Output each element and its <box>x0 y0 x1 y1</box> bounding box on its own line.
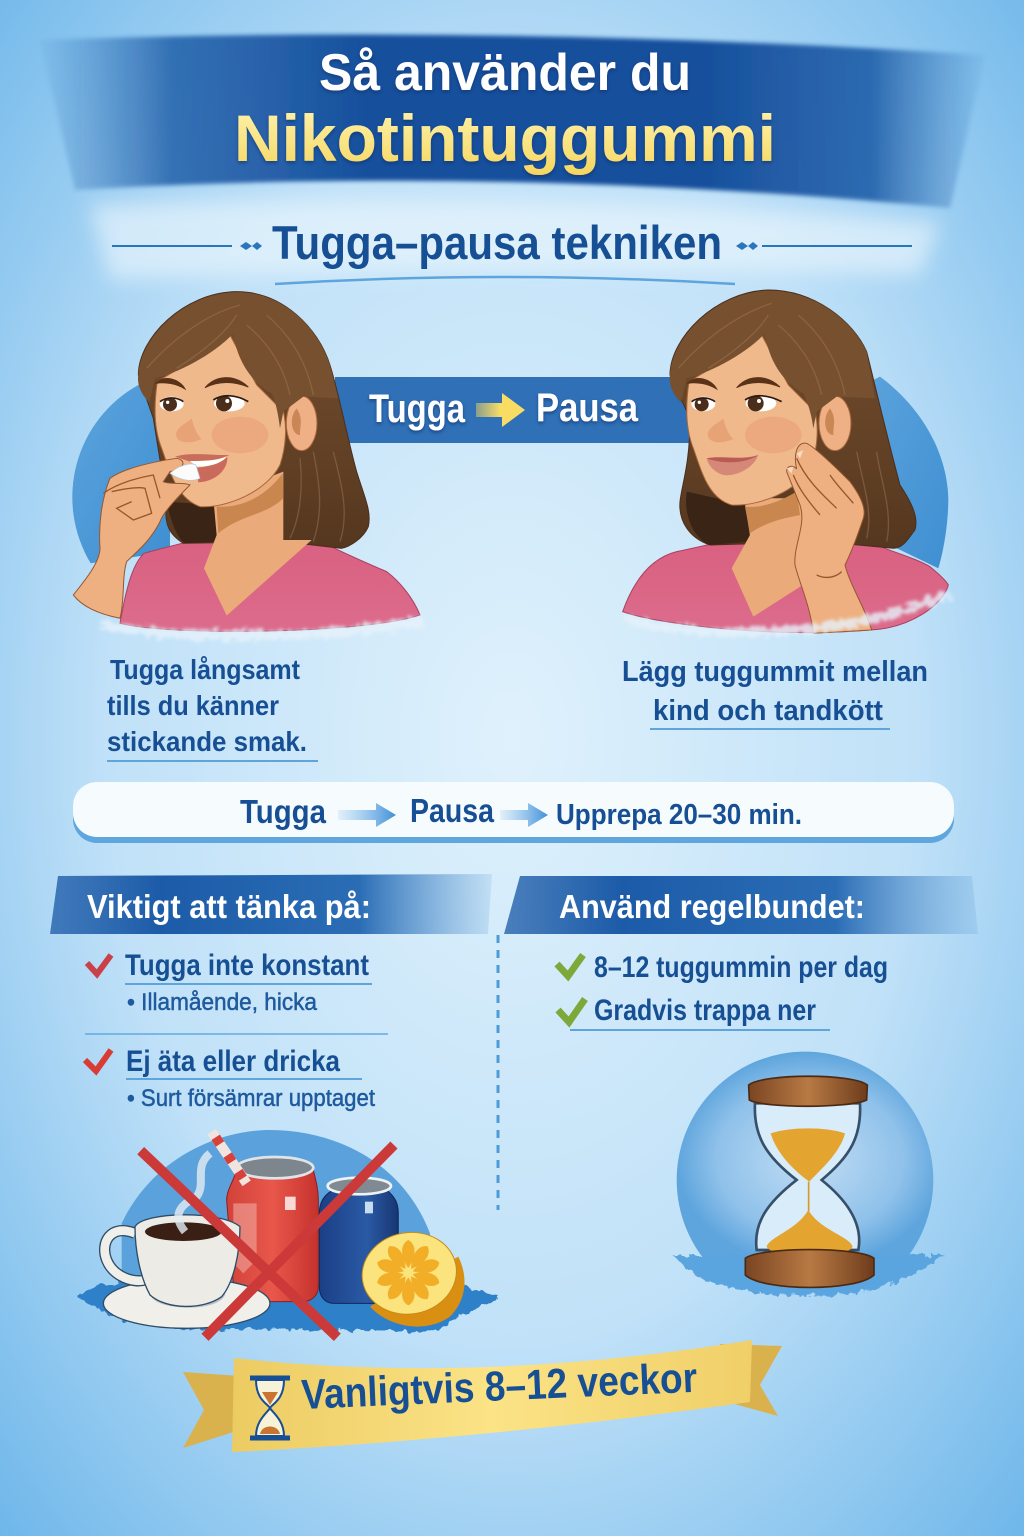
tugga pausa banner <box>335 377 692 443</box>
subtitle band <box>90 200 940 284</box>
label tugga: Tugga <box>369 387 466 431</box>
caption left: Tugga långsamt <box>110 654 300 685</box>
caption right <box>622 656 928 729</box>
item 4: Gradvis trappa ner <box>594 994 816 1027</box>
check red 2 <box>85 1050 111 1071</box>
item 3: 8–12 tuggummin per dag <box>594 951 888 984</box>
ribbon text: Vanligtvis 8–12 veckor <box>300 1354 698 1418</box>
caption right: kind och tandkött <box>653 695 883 727</box>
woman chewing <box>72 292 423 636</box>
check green 1 <box>557 955 583 976</box>
illustration: hourglass <box>673 1052 943 1295</box>
arrow 1 <box>338 803 396 827</box>
divider <box>496 935 500 1210</box>
panel heading left: Viktigt att tänka på: <box>87 888 371 925</box>
caption right: Lägg tuggummit mellan <box>622 656 928 688</box>
panel: använd regelbundet <box>504 876 978 1030</box>
coffee cup <box>103 1153 270 1328</box>
step tugga: Tugga <box>240 793 327 830</box>
panel heading left <box>50 874 492 934</box>
caption left: stickande smak. <box>107 726 307 757</box>
arrow 2 <box>500 803 548 827</box>
label pausa: Pausa <box>536 386 639 430</box>
illustration: forbidden drinks <box>77 1130 500 1337</box>
check red 1 <box>87 955 111 974</box>
title line 1: Så använder du <box>319 44 691 102</box>
panel heading right: Använd regelbundet: <box>559 888 865 925</box>
title banner <box>40 35 985 208</box>
panel: viktigt att tänka på <box>50 874 492 1112</box>
woman pausing <box>623 290 950 633</box>
sub item 2: • Surt försämrar upptaget <box>127 1085 375 1112</box>
panel heading right <box>504 876 978 934</box>
red can <box>212 1132 318 1302</box>
ribbon: duration <box>183 1340 782 1452</box>
caption left: tills du känner <box>107 690 279 721</box>
step pausa: Pausa <box>410 792 495 829</box>
blue can <box>319 1178 398 1303</box>
sub item 1: • Illamående, hicka <box>127 989 318 1016</box>
title line 2: Nikotintuggummi <box>234 101 776 175</box>
caption left <box>107 654 318 761</box>
check green 2 <box>558 999 585 1022</box>
arrow <box>476 393 525 427</box>
lemon <box>356 1225 464 1327</box>
item 1: Tugga inte konstant <box>125 949 369 982</box>
step repeat: Upprepa 20–30 min. <box>556 799 802 831</box>
red cross <box>141 1145 394 1337</box>
ribbon hourglass icon <box>250 1378 290 1438</box>
process bar <box>73 782 954 843</box>
item 2: Ej äta eller dricka <box>126 1045 340 1078</box>
subtitle: Tugga–pausa tekniken <box>272 216 722 269</box>
